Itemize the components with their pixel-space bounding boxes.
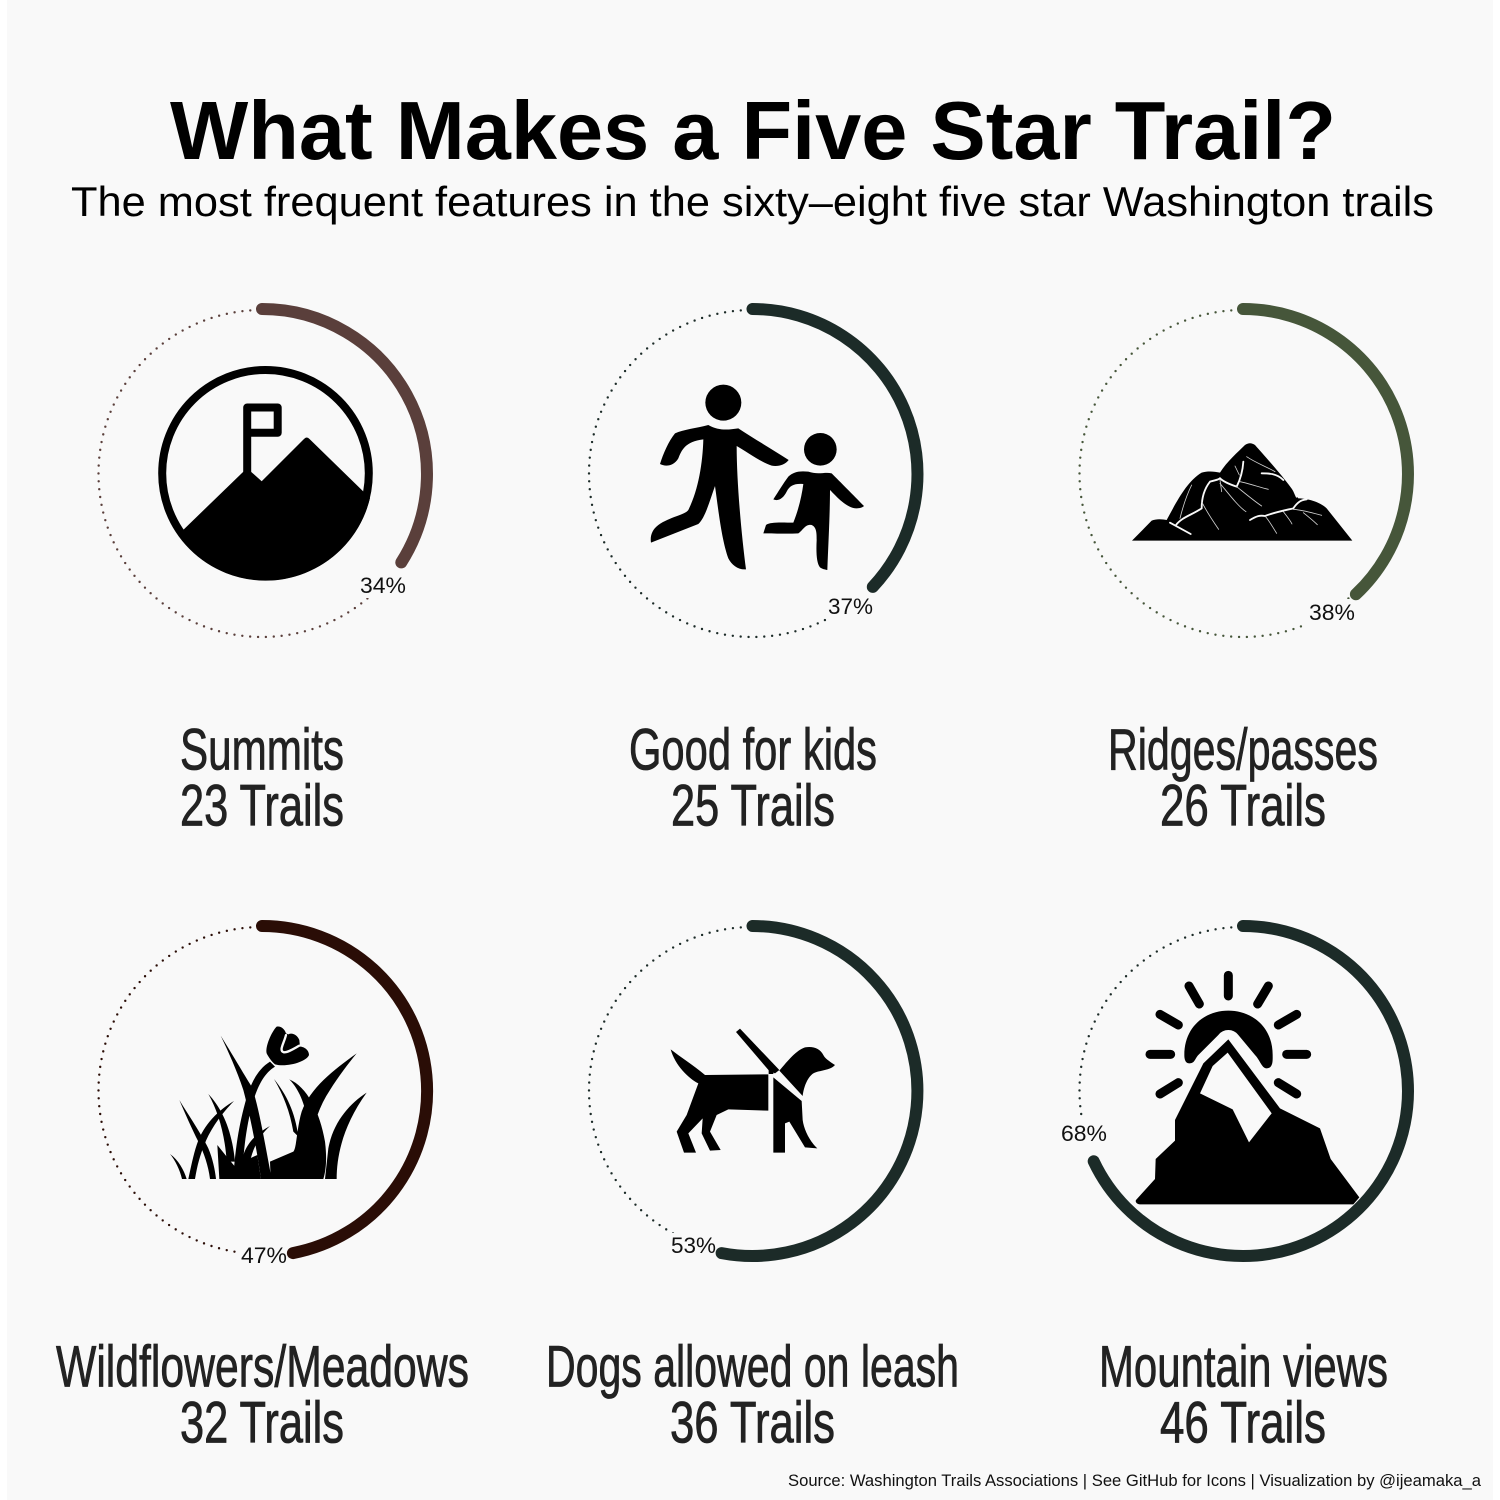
icon: ridge mountain bbox=[1132, 443, 1352, 541]
label backing bbox=[1058, 1117, 1110, 1157]
label backing bbox=[356, 566, 412, 598]
percent label: 34% bbox=[360, 573, 406, 598]
dotted ring bbox=[98, 927, 426, 1254]
feature label: 26 Trails bbox=[1160, 774, 1326, 838]
dotted ring bbox=[589, 927, 916, 1254]
progress arc 53% bbox=[722, 926, 917, 1256]
feature label: 36 Trails bbox=[670, 1390, 835, 1456]
percent label: 68% bbox=[1061, 1121, 1107, 1146]
progress arc 68% bbox=[1094, 926, 1408, 1256]
label backing bbox=[826, 592, 880, 619]
progress arc 47% bbox=[262, 926, 427, 1253]
feature label: Wildflowers/Meadows bbox=[56, 1334, 469, 1400]
label backing bbox=[669, 1233, 718, 1258]
percent label: 38% bbox=[1309, 600, 1355, 625]
feature label: Dogs allowed on leash bbox=[546, 1334, 959, 1400]
progress arc 38% bbox=[1243, 309, 1408, 594]
feature label: Mountain views bbox=[1099, 1334, 1388, 1400]
dotted ring bbox=[1080, 310, 1406, 637]
feature label bbox=[1108, 718, 1378, 838]
icon: dog in harness bbox=[671, 1029, 835, 1153]
feature label: 23 Trails bbox=[180, 774, 344, 838]
icon: summit flag bbox=[162, 370, 370, 580]
feature label: Summits bbox=[180, 718, 344, 782]
feature label bbox=[629, 718, 877, 838]
icon: grass and flower bbox=[170, 1026, 367, 1179]
panel: mountain views bbox=[1058, 926, 1408, 1456]
dotted ring bbox=[589, 310, 916, 637]
dotted ring bbox=[98, 310, 426, 637]
panel: summits bbox=[98, 309, 427, 838]
percent label: 47% bbox=[241, 1243, 287, 1268]
source note: Source: Washington Trails Associations | See GitHub for Icons | Visualization by @ijeamaka_a bbox=[788, 1472, 1482, 1490]
feature label: 25 Trails bbox=[671, 774, 835, 838]
progress arc 37% bbox=[752, 309, 917, 587]
feature label bbox=[1099, 1334, 1388, 1456]
feature label: Ridges/passes bbox=[1108, 718, 1378, 782]
percent label: 53% bbox=[671, 1233, 716, 1258]
label backing bbox=[1306, 599, 1362, 625]
title: What Makes a Five Star Trail? bbox=[170, 84, 1336, 177]
subtitle: The most frequent features in the sixty–eight five star Washington trails bbox=[71, 178, 1434, 225]
percent label: 37% bbox=[828, 594, 873, 619]
feature label bbox=[180, 718, 344, 838]
dotted ring bbox=[1080, 927, 1406, 1254]
label backing bbox=[239, 1243, 289, 1268]
icon: mountain with sun bbox=[1136, 975, 1359, 1204]
panel: wildflowers and meadows bbox=[56, 926, 469, 1456]
progress arc 34% bbox=[262, 309, 427, 562]
panel: good for kids bbox=[589, 309, 917, 838]
feature label: Good for kids bbox=[629, 718, 877, 782]
feature label: 32 Trails bbox=[180, 1390, 344, 1456]
icon: adult and child running bbox=[651, 385, 864, 570]
feature label: 46 Trails bbox=[1160, 1390, 1326, 1456]
panel: dogs allowed on leash bbox=[546, 926, 959, 1456]
feature label bbox=[56, 1334, 469, 1456]
feature label bbox=[546, 1334, 959, 1456]
panel: ridges and passes bbox=[1080, 309, 1408, 838]
